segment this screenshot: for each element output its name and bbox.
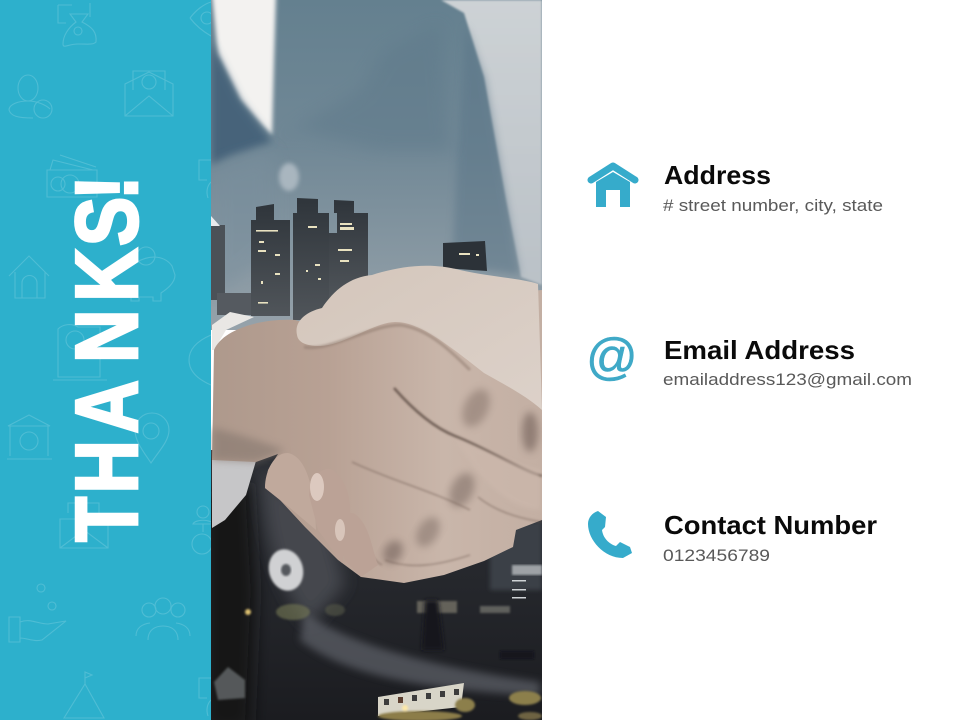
icon: envelope with coin xyxy=(125,71,173,116)
finger crease lines xyxy=(348,462,542,565)
fingertip two xyxy=(309,469,350,563)
tower one xyxy=(251,204,290,316)
window lights xyxy=(256,223,479,304)
text: email: emailaddress123@gmail.com xyxy=(663,370,912,389)
dark wrist shading xyxy=(212,428,285,462)
icon: eye xyxy=(190,2,213,36)
icon: at sign: @ xyxy=(586,328,638,385)
black left coat xyxy=(205,480,256,720)
heading: contact: Contact Number xyxy=(664,510,877,540)
finger underside highlight xyxy=(472,444,542,478)
icon: bank xyxy=(7,415,52,459)
icon: partial bag lower edge xyxy=(199,678,211,716)
coat button xyxy=(267,548,305,592)
icon: partial bag right edge xyxy=(199,160,211,198)
contact item: email xyxy=(586,328,912,389)
lower left jacket xyxy=(214,150,272,290)
nail two xyxy=(335,519,345,541)
dark left lapel xyxy=(211,42,272,165)
knuckle two xyxy=(522,412,538,452)
icon pattern xyxy=(7,2,213,718)
small left house xyxy=(214,667,245,700)
title: THANKS! xyxy=(58,175,156,542)
text: number: 0123456789 xyxy=(663,546,770,565)
nail one xyxy=(310,473,324,501)
icon: house xyxy=(9,256,49,298)
city skyline xyxy=(211,198,487,320)
suit jacket xyxy=(211,0,542,330)
tower four xyxy=(443,241,487,271)
icon: mountain flag xyxy=(64,672,104,718)
knuckle four xyxy=(414,515,442,549)
thumb shadow xyxy=(304,325,470,370)
jacket button xyxy=(279,163,299,191)
icon: laptop xyxy=(53,325,107,380)
right city block xyxy=(490,520,542,590)
icon: hand with coins xyxy=(9,584,66,642)
icon: house xyxy=(591,166,635,207)
mid city lights xyxy=(245,601,534,659)
icon: piggy bank xyxy=(131,247,175,301)
jacket sleeve shadow xyxy=(452,25,520,275)
icon: person with coin xyxy=(9,75,52,118)
top shirt cuff xyxy=(212,312,254,350)
panel: teal sidebar xyxy=(0,0,213,720)
white shirt xyxy=(212,0,276,135)
fingertip one xyxy=(265,453,316,530)
contact item: address xyxy=(591,160,883,215)
bottom building xyxy=(378,683,464,716)
dark tree xyxy=(422,600,444,650)
jacket lapel shading xyxy=(336,115,436,140)
icon: banknotes xyxy=(47,155,97,197)
handshake xyxy=(212,266,542,583)
icon: money bag xyxy=(58,3,96,46)
dark coat and night city xyxy=(211,450,542,720)
heading: email: Email Address xyxy=(664,335,855,365)
fingertip three xyxy=(335,513,378,577)
clasped hands silhouette xyxy=(212,290,542,583)
bottom trees lights xyxy=(378,691,542,720)
bottom shirt cuff xyxy=(212,458,256,528)
knuckle three xyxy=(446,470,478,510)
text: street: # street number, city, state xyxy=(663,196,883,215)
icon: person coin right edge xyxy=(192,506,213,554)
panel: handshake photo xyxy=(205,0,542,720)
icon: team xyxy=(136,598,190,640)
tower three xyxy=(329,200,368,300)
knuckle one xyxy=(460,387,492,429)
background wall xyxy=(441,0,542,285)
icon: partial circle right edge xyxy=(189,335,211,385)
thumb xyxy=(297,266,542,410)
finger gap one xyxy=(394,388,542,476)
tower two xyxy=(293,198,329,320)
icon: location pin xyxy=(135,413,169,463)
knuckle five xyxy=(379,537,407,567)
coat lapel panel xyxy=(262,470,345,625)
contact item: phone xyxy=(588,510,877,565)
heading: address: Address xyxy=(664,160,771,190)
icon: envelope xyxy=(60,503,108,548)
icon: phone xyxy=(588,511,632,558)
left tower xyxy=(211,225,225,300)
coat fold xyxy=(300,612,540,696)
